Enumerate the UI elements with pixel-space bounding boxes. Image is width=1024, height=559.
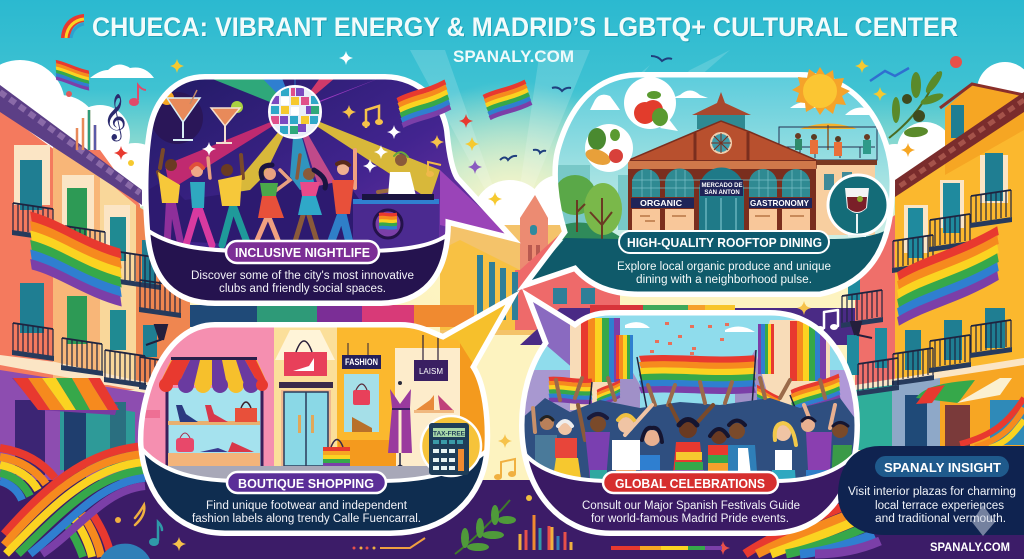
music notes and sparkles, top left: 𝄞 (103, 94, 127, 142)
rainbow swoosh, bottom center-right (745, 507, 880, 554)
shop walls (143, 328, 274, 466)
side flags (548, 374, 840, 408)
panel: boutique shopping (135, 298, 515, 540)
description: spanaly insight: and traditional vermouth. (875, 513, 1006, 525)
rainbow swoosh, right edge (960, 398, 1024, 448)
text band (532, 231, 884, 292)
disco ball (268, 80, 322, 139)
decorative diamond (972, 505, 995, 536)
crowd of people (533, 405, 852, 485)
shelf shoes (414, 395, 454, 413)
bottom decorations: notes (115, 301, 838, 555)
parade street backdrop (534, 316, 844, 408)
market hall: SAN ANTON (704, 190, 740, 196)
hanging rainbow banners (581, 318, 826, 382)
description: boutique shopping: Find unique footwear and independent (206, 500, 408, 512)
shop window (167, 388, 263, 466)
sign: fashion: FASHION (345, 357, 378, 367)
subtitle: SPANALY.COM (453, 47, 574, 66)
dancers (158, 150, 416, 245)
birds (500, 56, 672, 160)
icon: vegetables bubble (583, 124, 633, 172)
confetti (650, 322, 729, 355)
description: inclusive nightlife: clubs and friendly social spaces. (219, 283, 386, 295)
panel: high-quality rooftop dining (520, 67, 900, 300)
text band (144, 448, 484, 530)
small flag, top left (56, 61, 89, 89)
label: inclusive nightlife (226, 241, 379, 263)
description: spanaly insight: local terrace experiences (875, 500, 1004, 512)
icon: wine glass (828, 175, 888, 236)
music notes and sparkles, top left (66, 51, 502, 206)
description: global celebrations (582, 500, 800, 525)
mannequin and dress (388, 381, 412, 472)
description: boutique shopping: fashion labels along trendy Calle Fuencarral. (192, 513, 421, 525)
crowd silhouettes (148, 170, 360, 250)
display window (344, 374, 379, 432)
market hall: ORGANIC (640, 198, 682, 208)
bottom decorations: rainbow dash (611, 546, 722, 550)
icon: tax-free calculator (421, 416, 481, 476)
striped awning (159, 357, 268, 393)
shop door (279, 382, 333, 466)
text band (150, 230, 445, 300)
bottom decorations: laurel branch (455, 500, 516, 554)
center street buildings (187, 195, 860, 345)
label: global celebrations (603, 472, 778, 493)
blue dome, bottom left (100, 544, 150, 559)
description: inclusive nightlife: Discover some of the city's most innovative (191, 270, 414, 282)
label: spanaly insight (875, 456, 1009, 477)
back crowd (520, 398, 860, 480)
striped awning, right (916, 378, 1012, 404)
sign: laism: LAISM (419, 367, 443, 376)
text band (527, 454, 852, 530)
label: high-quality rooftop dining: HIGH-QUALITY ROOFTOP DINING (627, 235, 822, 250)
icon: apple bubble (624, 77, 678, 131)
market hall: MERCADO DE (701, 183, 743, 189)
sun glow (382, 80, 642, 340)
center rainbow flag (483, 81, 532, 119)
rainbow shopping bag (323, 440, 350, 468)
description: inclusive nightlife (191, 270, 414, 295)
description: boutique shopping (192, 500, 421, 525)
label: boutique shopping: BOUTIQUE SHOPPING (238, 476, 374, 491)
panel: spanaly insight (838, 446, 1024, 536)
market sky backdrop (554, 78, 890, 250)
label: inclusive nightlife: INCLUSIVE NIGHTLIFE (235, 245, 370, 260)
market hall (628, 92, 816, 230)
cocktails (160, 90, 243, 143)
panel: inclusive nightlife (140, 55, 520, 310)
panel: global celebrations (515, 295, 862, 540)
flag on nightlife panel (397, 82, 451, 126)
rooftop terrace (779, 124, 877, 235)
icon: sun (792, 67, 850, 115)
pavement (168, 466, 430, 479)
label: spanaly insight: SPANALY INSIGHT (884, 460, 1001, 475)
raised arms of back crowd (556, 378, 825, 405)
icon: tax-free calculator: TAX-FREE (433, 430, 466, 438)
sign: fashion (342, 343, 381, 369)
building: right street facade (841, 84, 1024, 450)
description: spanaly insight: Visit interior plazas for charming (848, 486, 1016, 498)
top right decorations (855, 56, 962, 157)
light beams (165, 80, 440, 194)
street lamp, left (146, 325, 167, 345)
title: CHUECA: VIBRANT ENERGY & MADRID’S LGBTQ+ CULTURAL CENTER (92, 12, 958, 42)
rainbow swoosh, bottom left (0, 446, 145, 557)
description: high-quality rooftop dining: dining with a neighborhood pulse. (636, 274, 812, 286)
description: global celebrations: for world-famous Madrid Pride events. (591, 513, 789, 525)
bottom decorations: equalizer bars (520, 515, 571, 550)
night scene backdrop (148, 80, 486, 248)
description: high-quality rooftop dining: Explore local organic produce and unique (617, 261, 831, 273)
sign: laism (414, 335, 448, 381)
olive branch (889, 69, 945, 138)
street lamp, right (851, 322, 872, 338)
balcony rainbow flag, left (31, 215, 121, 303)
label: global celebrations: GLOBAL CELEBRATIONS (615, 476, 765, 491)
trees (558, 175, 622, 240)
footer url: SPANALY.COM (930, 540, 1010, 554)
sign: shoe bag (284, 341, 327, 376)
label: high-quality rooftop dining (619, 231, 829, 253)
description: spanaly insight (848, 486, 1016, 525)
sparkles and notes (202, 105, 444, 177)
rainbow awning, left (12, 378, 119, 415)
main parade banner (640, 358, 755, 391)
DJ booth (353, 194, 439, 250)
description: high-quality rooftop dining (617, 261, 831, 286)
balcony rainbow flag, right (898, 230, 998, 322)
building: left street facade (0, 85, 190, 480)
label: boutique shopping (227, 472, 386, 493)
dark lower band (0, 480, 1024, 559)
title: CHUECA: VIBRANT ENERGY & MADRID’S LGBTQ+ CULTURAL CENTER (93, 13, 959, 43)
description: global celebrations: Consult our Major Spanish Festivals Guide (582, 500, 800, 512)
bottom decorations: dots and line (352, 538, 425, 550)
clouds (0, 60, 1024, 256)
sun rays (410, 50, 730, 240)
market hall: GASTRONOMY (750, 198, 809, 208)
